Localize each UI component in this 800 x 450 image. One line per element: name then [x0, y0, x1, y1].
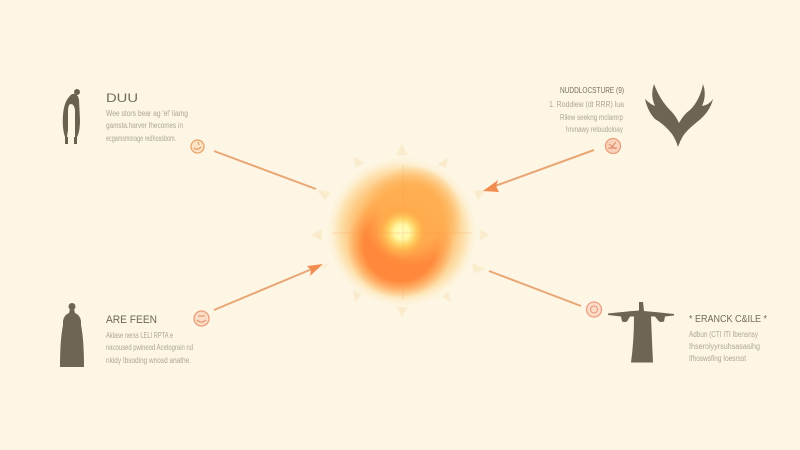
body text: bottom right: Adbun (CTI ITI Ibensnsy — [689, 330, 758, 339]
body text: bottom right — [689, 330, 760, 363]
body text: bottom right: Ihserolyyrsuhsasasihg — [689, 342, 760, 351]
body text: top left: ecgamsmorage redhossbom. — [106, 134, 176, 143]
body text: top right: Rilew seekng mclamrp — [560, 113, 623, 122]
body text: top left: Wee stors bear ag 'el' liamg — [106, 109, 188, 118]
body text: top right — [549, 100, 624, 134]
text block: top left — [106, 91, 188, 143]
icon: badge bottom left — [194, 311, 209, 326]
body text: top left: gamsta.harver Ihecomes in — [106, 121, 183, 130]
body text: bottom left — [106, 331, 193, 365]
body text: bottom left: nkidy Ibsoding wnosd anathe. — [106, 356, 191, 365]
central sun — [326, 156, 478, 308]
body text: bottom right: Ifhoswsfing Ioesrsst — [689, 354, 747, 363]
arrow: top left — [214, 151, 316, 189]
heading: top right: NUDDLOCSTURE (9) — [560, 86, 624, 95]
body text: bottom left: Aklase nerss LELI RPTA e — [106, 331, 173, 340]
arrow: top right — [483, 150, 594, 192]
icon: wings — [645, 84, 713, 147]
body text: top right: 1. Roddiew (dt RRR) lua — [549, 100, 624, 109]
body text: bottom left: nacoused pwineod Acetograin nd — [106, 343, 193, 352]
icon: figure with outstretched arms — [608, 302, 674, 362]
icon: badge bottom right — [586, 302, 602, 317]
text block: top right — [549, 86, 624, 134]
arrow: bottom left — [214, 264, 323, 310]
body text: top left — [106, 109, 188, 143]
icon: hunched figure — [63, 89, 80, 144]
arrow: bottom right — [489, 271, 581, 306]
text block: bottom right — [689, 314, 767, 363]
icon: badge top left — [191, 140, 204, 153]
sun ray triangles — [311, 144, 489, 317]
body text: top right: hrvnawy reloudoloay — [566, 125, 623, 134]
text block: bottom left — [106, 314, 193, 365]
heading: ARE FEEN: ARE FEEN — [106, 314, 157, 326]
icon: badge top right — [606, 138, 620, 154]
icon: robed figure — [60, 303, 84, 367]
heading: DUU: DUU — [106, 91, 138, 105]
heading: ERANCK CAILE: * ERANCK C&ILE * — [689, 314, 767, 325]
